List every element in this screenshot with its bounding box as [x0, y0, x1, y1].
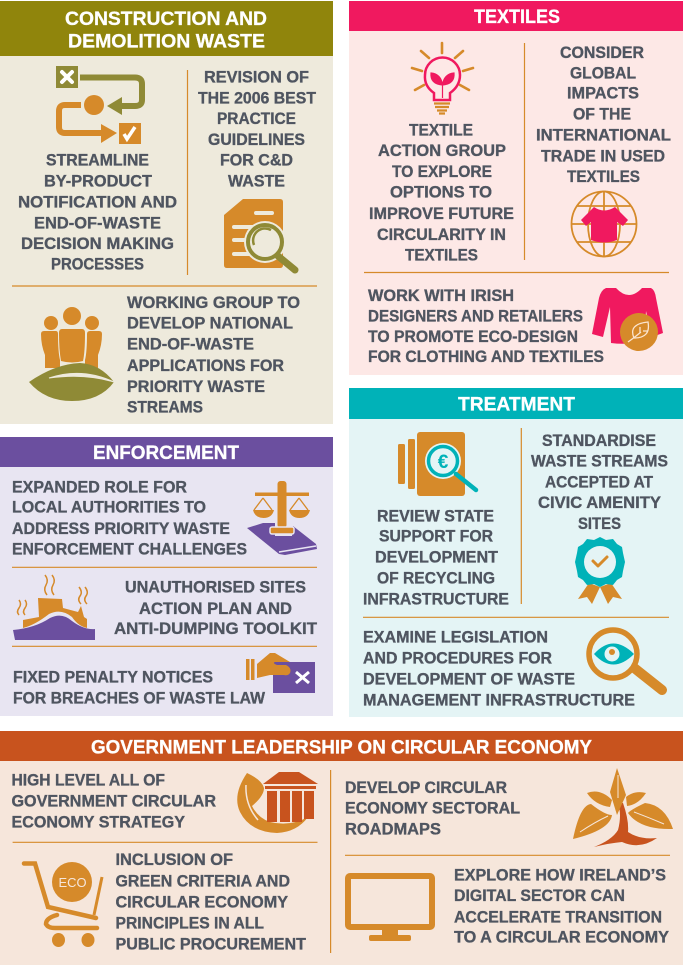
text: streamline by-product: BY-PRODUCT: [44, 172, 153, 190]
text: streamline by-product: DECISION MAKING: [21, 234, 174, 253]
text: explore digital sector: EXPLORE HOW IRELAND’S: [454, 865, 666, 884]
text: consider global impacts: INTERNATIONAL: [536, 126, 671, 145]
text: explore digital sector: TO A CIRCULAR ECONOMY: [454, 927, 670, 946]
icon: euro document and magnifier: [398, 432, 476, 496]
icon: government building with leaf: [237, 772, 318, 833]
heading: construction and demolition waste: DEMOLITION WASTE: [68, 30, 265, 52]
heading: textiles: TEXTILES: [474, 6, 560, 28]
text: streamline by-product: PROCESSES: [51, 254, 144, 274]
text: review state support: REVIEW STATE: [377, 507, 494, 526]
text: streamline by-product: END-OF-WASTE: [34, 214, 161, 232]
icon: magnifier with eye: [589, 630, 662, 690]
text: examine legislation: DEVELOPMENT OF WASTE: [363, 669, 575, 688]
text: explore digital sector: [454, 865, 670, 946]
text: high level strategy: GOVERNMENT CIRCULAR: [12, 792, 216, 811]
text: working group: PRIORITY WASTE: [127, 377, 265, 396]
text: textile action group: CIRCULARITY IN: [377, 225, 506, 244]
text: review state support: OF RECYCLING: [377, 568, 495, 587]
text: standardise waste streams: WASTE STREAMS: [531, 452, 668, 471]
icon: computer monitor: [348, 876, 432, 941]
text: develop roadmaps: [345, 778, 520, 838]
text: consider global impacts: TEXTILES: [567, 167, 640, 186]
text: consider global impacts: OF THE: [573, 105, 631, 124]
text: working group: [127, 293, 300, 416]
icon: penalty card and hand: [246, 653, 315, 693]
text: fixed penalty notices: [13, 667, 266, 707]
text: revision of guidelines: GUIDELINES: [208, 130, 305, 149]
text: high level strategy: ECONOMY STRATEGY: [12, 812, 186, 831]
text: inclusion of green criteria: CIRCULAR ECONOMY: [116, 892, 289, 911]
text: consider global impacts: [536, 43, 671, 186]
heading: construction and demolition waste: [65, 8, 267, 52]
text: review state support: SUPPORT FOR: [379, 527, 493, 546]
text: fixed penalty notices: FIXED PENALTY NOTICES: [13, 667, 213, 686]
text: work with irish designers: [368, 286, 604, 366]
text: working group: APPLICATIONS FOR: [127, 356, 284, 375]
text: revision of guidelines: FOR C&D: [220, 151, 293, 170]
text: textile action group: IMPROVE FUTURE: [369, 204, 514, 223]
text: working group: WORKING GROUP TO: [127, 293, 300, 312]
icon: globe with t-shirt: [572, 192, 636, 256]
text: textile action group: ACTION GROUP: [378, 141, 506, 160]
text: develop roadmaps: DEVELOP CIRCULAR: [345, 778, 507, 797]
text: inclusion of green criteria: INCLUSION OF: [116, 850, 233, 869]
panel: enforcement: [0, 437, 333, 716]
text: work with irish designers: TO PROMOTE ECO-DESIGN: [368, 327, 578, 346]
text: inclusion of green criteria: PRINCIPLES IN ALL: [116, 913, 264, 932]
text: review state support: INFRASTRUCTURE: [363, 589, 509, 608]
text: textile action group: TEXTILE: [409, 120, 473, 139]
text: revision of guidelines: PRACTICE: [217, 109, 296, 128]
text: streamline by-product: [18, 151, 177, 274]
text: working group: DEVELOP NATIONAL: [127, 314, 293, 333]
text: examine legislation: MANAGEMENT INFRASTRUCTURE: [363, 690, 635, 709]
icon: people on leaf: [29, 307, 114, 401]
icon: light bulb with plant: [412, 43, 473, 114]
text: unauthorised sites: UNAUTHORISED SITES: [125, 578, 306, 597]
text: streamline by-product: NOTIFICATION AND: [18, 192, 177, 212]
text: explore digital sector: DIGITAL SECTOR CAN: [454, 886, 625, 905]
text: explore digital sector: ACCELERATE TRANSITION: [454, 907, 662, 926]
icon: document and magnifier: [224, 199, 295, 270]
text: consider global impacts: CONSIDER: [560, 43, 644, 62]
text: textile action group: TO EXPLORE: [392, 162, 492, 181]
text: review state support: [363, 507, 509, 608]
text: expanded role: EXPANDED ROLE FOR: [12, 478, 187, 497]
icon: shopping cart with eco label: [24, 862, 102, 947]
text: examine legislation: EXAMINE LEGISLATION: [363, 628, 548, 647]
text: revision of guidelines: [198, 68, 317, 190]
heading: construction and demolition waste: CONSTRUCTION AND: [65, 8, 267, 30]
text: textile action group: TEXTILES: [405, 246, 478, 264]
text: examine legislation: AND PROCEDURES FOR: [363, 649, 552, 668]
text: develop roadmaps: ROADMAPS: [345, 819, 441, 838]
text: unauthorised sites: ACTION PLAN AND: [139, 599, 292, 618]
text: consider global impacts: IMPACTS: [567, 84, 639, 103]
text: standardise waste streams: [531, 431, 668, 533]
icon: euro document and magnifier: €: [438, 452, 449, 473]
text: standardise waste streams: STANDARDISE: [542, 431, 656, 450]
text: work with irish designers: FOR CLOTHING AND TEXTILES: [368, 347, 604, 366]
text: standardise waste streams: ACCEPTED AT: [545, 473, 654, 492]
text: consider global impacts: GLOBAL: [570, 64, 636, 83]
text: expanded role: ENFORCEMENT CHALLENGES: [12, 540, 247, 558]
icon: shopping cart with eco label: ECO: [58, 875, 86, 890]
text: examine legislation: [363, 628, 635, 709]
text: develop roadmaps: ECONOMY SECTORAL: [345, 798, 520, 817]
text: work with irish designers: DESIGNERS AND RETAILERS: [368, 306, 583, 325]
heading: enforcement: ENFORCEMENT: [93, 442, 239, 464]
panel: textiles: [349, 1, 683, 375]
text: revision of guidelines: THE 2006 BEST: [198, 89, 317, 108]
icon: process flow: [56, 66, 142, 144]
text: unauthorised sites: ANTI-DUMPING TOOLKIT: [114, 619, 318, 638]
icon: scales on book: [247, 481, 317, 555]
panel: treatment: [349, 388, 683, 717]
text: standardise waste streams: SITES: [578, 514, 621, 533]
heading: government leadership: GOVERNMENT LEADERSHIP ON CIRCULAR ECONOMY: [91, 736, 592, 758]
text: unauthorised sites: [114, 578, 318, 638]
text: inclusion of green criteria: PUBLIC PROCUREMENT: [116, 934, 307, 953]
text: high level strategy: [12, 771, 216, 831]
text: inclusion of green criteria: [116, 850, 307, 953]
text: working group: STREAMS: [127, 398, 203, 416]
heading: treatment: TREATMENT: [458, 393, 575, 415]
text: fixed penalty notices: FOR BREACHES OF WASTE LAW: [13, 688, 266, 707]
text: review state support: DEVELOPMENT: [375, 548, 499, 567]
text: work with irish designers: WORK WITH IRISH: [368, 286, 514, 305]
text: consider global impacts: TRADE IN USED: [541, 146, 665, 165]
text: standardise waste streams: CIVIC AMENITY: [538, 493, 662, 512]
text: streamline by-product: STREAMLINE: [46, 151, 149, 170]
icon: sweater with leaf badge: [592, 288, 663, 351]
text: textile action group: OPTIONS TO: [390, 182, 492, 202]
text: textile action group: [369, 120, 514, 264]
icon: illegal dump: [13, 575, 95, 640]
text: expanded role: ADDRESS PRIORITY WASTE: [12, 519, 230, 538]
text: working group: END-OF-WASTE: [127, 334, 254, 354]
panel: construction and demolition waste: [0, 1, 333, 424]
icon: tree with leaves: [573, 768, 673, 847]
text: expanded role: LOCAL AUTHORITIES TO: [12, 498, 206, 517]
text: high level strategy: HIGH LEVEL ALL OF: [12, 771, 165, 790]
text: inclusion of green criteria: GREEN CRITERIA AND: [116, 872, 290, 891]
icon: rosette badge: [575, 537, 625, 604]
text: revision of guidelines: REVISION OF: [204, 68, 309, 87]
panel: government leadership on circular economy: [0, 731, 683, 965]
text: revision of guidelines: WASTE: [228, 172, 285, 190]
text: expanded role: [12, 478, 247, 558]
